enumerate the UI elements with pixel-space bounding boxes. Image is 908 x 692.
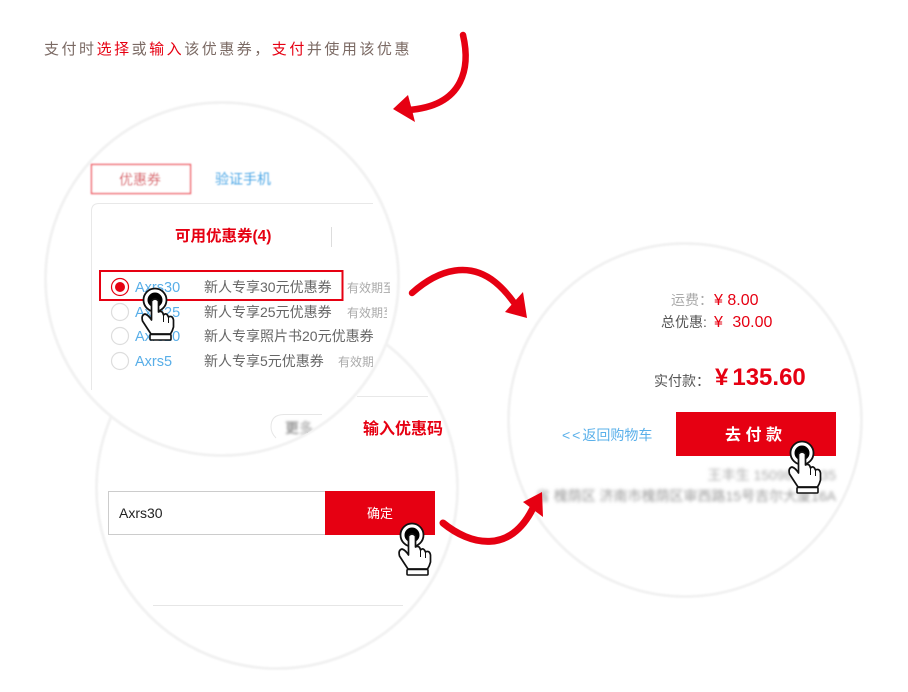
coupon row 3 — [112, 328, 374, 345]
tab: coupons, blurred: 优惠券 — [119, 172, 161, 188]
tab: verify phone, blurred: 验证手机 — [215, 171, 271, 187]
coupon row 4: Axrs5 — [135, 354, 172, 370]
pay button: 去付款 — [725, 425, 787, 444]
bottom divider line — [153, 605, 403, 606]
blurred address lines — [536, 467, 837, 504]
heading: instruction text: 支付时选择或输入该优惠券，支付并使用该优惠 — [44, 41, 412, 58]
panel: enter coupon code circle — [96, 308, 458, 668]
coupon row 2: 有效期至 — [347, 305, 395, 320]
heading: enter coupon code: 输入优惠码 — [363, 419, 443, 438]
coupon row 2 — [112, 304, 395, 321]
coupon row 4: 新人专享5元优惠券 — [204, 353, 324, 369]
tab: coupons, blurred — [92, 164, 190, 194]
coupon row 1, selected: 新人专享30元优惠券 — [204, 279, 332, 295]
arrow: heading to coupon circle — [393, 35, 466, 122]
arrow: code circle to payment circle — [443, 492, 543, 541]
coupon row 1, selected: 有效期至 — [347, 280, 395, 295]
confirm button: 确定 — [367, 506, 393, 521]
coupon row 2: 新人专享25元优惠券 — [204, 304, 332, 320]
coupon row 1, selected — [112, 278, 395, 296]
total discount — [662, 314, 772, 328]
more button, blurred — [271, 414, 322, 441]
back to cart link: <<返回购物车 — [562, 427, 652, 443]
coupon row 1, selected: Axrs30 — [135, 280, 180, 296]
panel: payment summary circle — [508, 244, 862, 596]
more button, blurred: 更多 — [285, 420, 313, 436]
coupon row 3: 新人专享照片书20元优惠券 — [204, 328, 374, 344]
panel: select coupon circle — [46, 102, 398, 456]
pay button — [676, 412, 836, 456]
amount paid: 实付款： — [654, 373, 710, 389]
total discount: 总优惠: — [661, 314, 707, 330]
coupon row 2: Axrs25 — [135, 305, 180, 321]
coupon code input: Axrs30 — [119, 505, 163, 521]
top divider line — [357, 396, 428, 397]
heading: available coupons: 可用优惠券(4) — [175, 226, 271, 245]
blurred address lines: 王丰生 15098xxxx35 — [708, 467, 836, 483]
shipping fee — [672, 292, 758, 306]
confirm button — [325, 491, 435, 535]
icon: hand pointer on coupon — [142, 288, 174, 340]
selected row highlight — [100, 271, 342, 300]
amount paid: ¥135.60 — [715, 364, 806, 391]
coupon row 3: Axrs20 — [135, 329, 180, 345]
icon: hand pointer on pay button — [789, 442, 820, 493]
arrow: coupon circle to payment circle — [412, 270, 527, 318]
total discount: ¥ 30.00 — [713, 314, 772, 331]
shipping fee: 运费： — [671, 292, 713, 308]
coupon row 4 — [112, 352, 386, 370]
coupon list container — [92, 204, 373, 390]
coupon code input — [108, 492, 325, 534]
blurred address lines: 省 槐荫区 济南市槐荫区审西路15号吉尔大厦16A — [536, 488, 837, 504]
shipping fee: ¥ 8.00 — [713, 292, 759, 309]
amount paid — [655, 368, 805, 388]
icon: hand pointer on confirm — [399, 524, 430, 575]
coupon row 4: 有效期至 — [338, 354, 386, 369]
